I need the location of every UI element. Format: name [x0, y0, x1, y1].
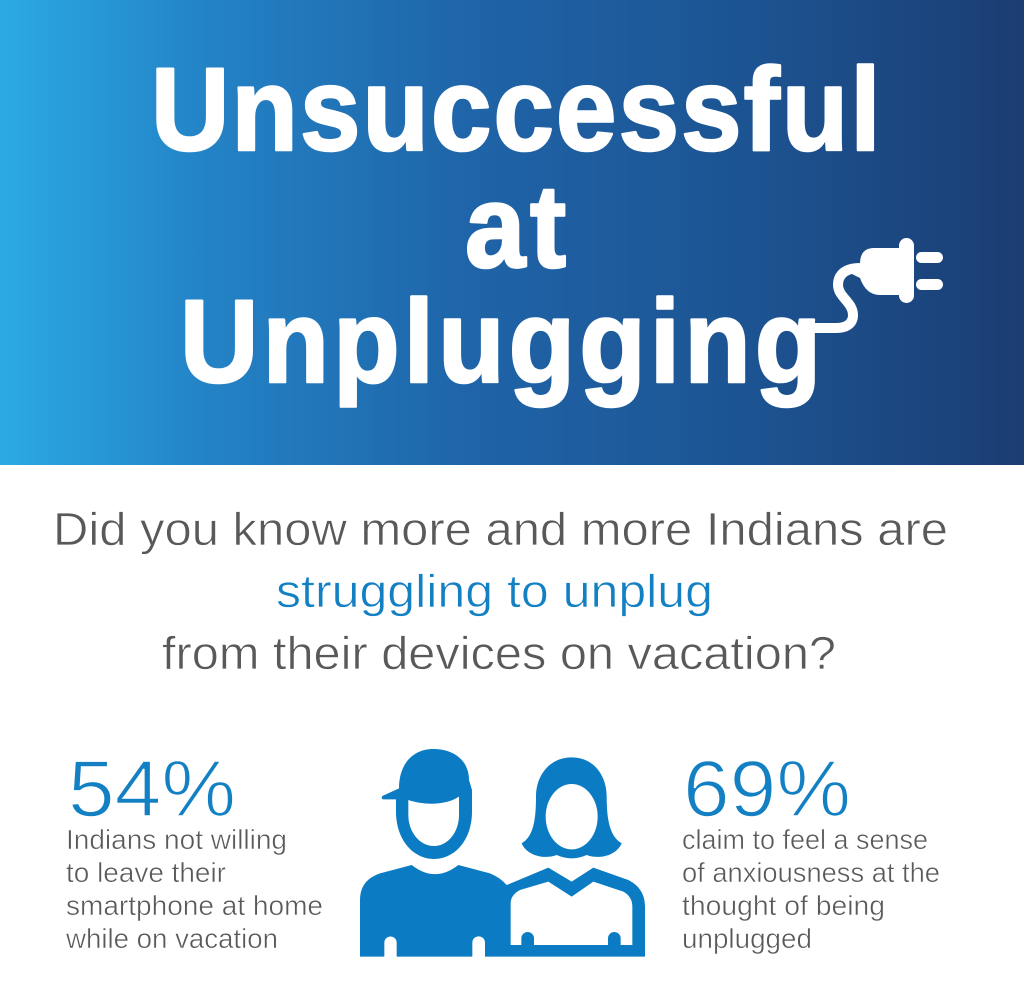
- right statistic: 69%: unplugged: [682, 923, 812, 954]
- panel: header banner: [0, 0, 1024, 465]
- right statistic: 69%: claim to feel a sense: [682, 824, 928, 855]
- icon: man and woman: [360, 749, 645, 957]
- intro text: [53, 503, 948, 679]
- left statistic: 54%: 54%: [68, 744, 236, 833]
- intro text: from their devices on vacation?: [162, 627, 836, 679]
- left statistic: 54%: while on vacation: [65, 923, 278, 954]
- title: Unplugging: [180, 276, 821, 408]
- intro text: Did you know more and more Indians are: [53, 503, 948, 555]
- left statistic: 54%: smartphone at home: [66, 890, 323, 921]
- left statistic: 54%: [65, 744, 323, 954]
- left statistic: 54%: to leave their: [66, 857, 226, 888]
- right statistic: 69%: [682, 744, 940, 954]
- right statistic: 69%: of anxiousness at the: [682, 857, 940, 888]
- icon: plug with cord: [812, 238, 943, 328]
- right statistic: 69%: thought of being: [682, 890, 885, 921]
- left statistic: 54%: Indians not willing: [66, 824, 287, 855]
- title: Unsuccessful: [151, 44, 881, 176]
- title: [151, 44, 881, 408]
- title: at: [465, 161, 566, 293]
- intro text: struggling to unplug: [276, 565, 713, 617]
- right statistic: 69%: 69%: [683, 744, 851, 833]
